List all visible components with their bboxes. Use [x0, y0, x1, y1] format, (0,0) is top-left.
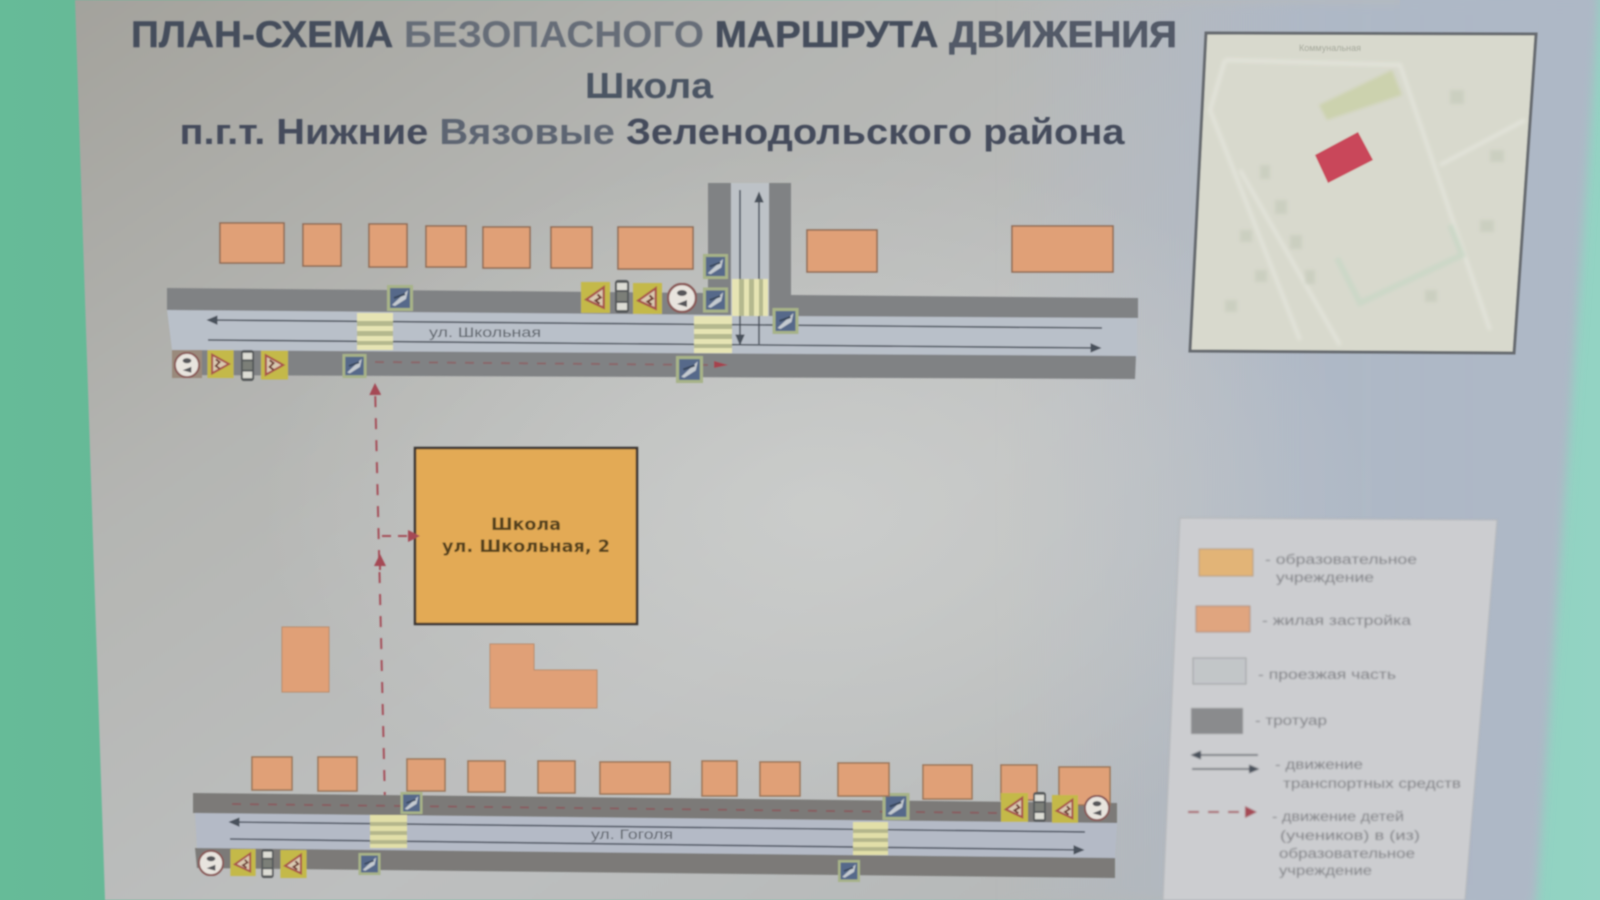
warning signs at left [172, 350, 288, 381]
title line 2: Школа [585, 65, 714, 106]
warning signs near junction [581, 280, 696, 314]
route arrow [714, 361, 728, 368]
title line 1: ПЛАН-СХЕМА БЕЗОПАСНОГО МАРШРУТА ДВИЖЕНИЯ [131, 14, 1177, 55]
lower houses [252, 757, 1110, 805]
legend: educational institution: учреждение [1276, 570, 1374, 585]
legend panel [1163, 518, 1497, 900]
warning signs at left [199, 849, 307, 878]
pedestrian crossing signs [358, 792, 910, 882]
title [131, 14, 1177, 152]
sports track [1337, 225, 1462, 303]
legend: vehicle traffic: транспортных средств [1283, 776, 1461, 791]
roadway [195, 813, 1117, 858]
map label: Коммунальная [1299, 43, 1361, 53]
school label: Школа [491, 515, 561, 534]
title line 3: п.г.т. Нижние Вязовые Зеленодольского района [180, 111, 1126, 152]
sidewalks [193, 793, 1117, 878]
legend: children movement: - движение детей [1272, 809, 1404, 824]
legend: educational institution [1199, 549, 1417, 585]
pedestrian crossing signs [342, 254, 798, 383]
inset location map [1190, 33, 1536, 353]
legend: educational institution: - образовательное [1265, 552, 1417, 567]
pedestrian route on sidewalk [232, 804, 1000, 813]
legend: children movement: учреждение [1279, 863, 1372, 878]
roadway [167, 310, 1137, 358]
vertical road [731, 183, 769, 320]
legend: children movement [1188, 809, 1420, 878]
warning signs at right of lower street [1001, 792, 1109, 823]
sidewalks [167, 183, 1138, 379]
traffic lines [208, 190, 1102, 348]
street label: ул. Гоголя [591, 826, 673, 842]
legend: sidewalk: - тротуар [1255, 713, 1327, 728]
school building: ул. Школьная, 2 [442, 537, 610, 556]
crosswalks [370, 815, 888, 855]
legend: vehicle traffic: - движение [1275, 757, 1363, 772]
upper street: ул. Школьная [167, 183, 1138, 383]
green field [1319, 70, 1402, 120]
street label: ул. Школьная [429, 324, 541, 340]
legend: children movement: (учеников) в (из) [1280, 828, 1420, 843]
legend: roadway: - проезжая часть [1258, 667, 1396, 682]
upper houses [220, 223, 1113, 272]
traffic lines [230, 822, 1085, 850]
school marker [1315, 132, 1373, 183]
pedestrian route on sidewalk [375, 362, 712, 365]
legend: roadway [1193, 658, 1396, 684]
legend: vehicle traffic [1192, 755, 1461, 791]
legend: residential: - жилая застройка [1262, 613, 1412, 628]
lower street: ул. Гоголя [193, 792, 1117, 882]
crosswalks [357, 279, 768, 353]
legend: sidewalk [1191, 708, 1327, 734]
children walking route [375, 385, 418, 803]
legend: children movement: образовательное [1279, 846, 1415, 861]
legend: residential [1196, 606, 1412, 632]
school building [415, 448, 637, 624]
middle houses [282, 627, 597, 708]
